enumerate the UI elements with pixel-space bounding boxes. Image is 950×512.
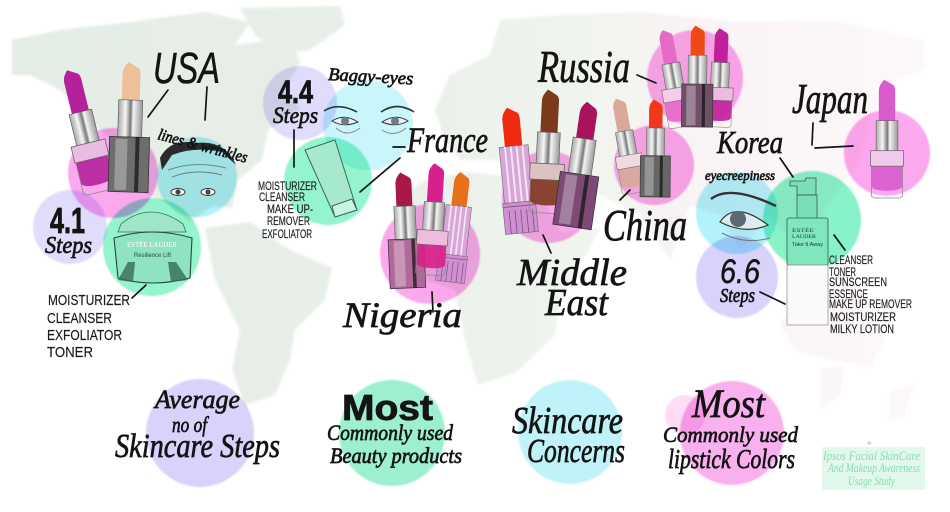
legend: most commonly used lipstick colors: Most: [691, 381, 766, 426]
green watercolor circle: [763, 171, 861, 269]
legend: skincare concerns: [512, 380, 625, 484]
heading: Middle East: Middle: [516, 252, 627, 294]
leader line: [205, 87, 207, 120]
concern: lines and wrinkles: lines & wrinkles: [156, 126, 249, 167]
icon: cleanser pump bottle: ESTÉE: [792, 226, 815, 234]
icon: orange lipstick: [436, 171, 477, 284]
icon: crimson lipstick: [385, 172, 426, 289]
icon: red lipstick: [493, 106, 538, 235]
aqua watercolor circle: [323, 80, 413, 170]
stat: 6.6 steps: Steps: [720, 285, 755, 307]
list: Korea beauty products: MILKY LOTION: [830, 322, 894, 336]
icon: brown lipstick: [528, 89, 568, 214]
stat: 4.1 steps: 4.1: [50, 200, 85, 241]
legend: average number of skincare steps: [115, 379, 280, 487]
icon: pink lipstick: [651, 27, 695, 129]
panel: Russia: [537, 25, 743, 129]
icon: magenta lipstick: [553, 99, 609, 230]
stat: 6.6 steps: 6.6: [720, 253, 760, 291]
legend: skincare concerns: Skincare: [512, 400, 623, 442]
list: France beauty products: REMOVER: [267, 214, 310, 228]
stat: 6.6 steps: [720, 253, 760, 307]
list: Korea beauty products: TONER: [829, 265, 856, 279]
illustration: face cream jar: Resilience Lift: [134, 253, 171, 259]
list: Korea beauty products: ESSENCE: [829, 287, 868, 301]
leader line: [393, 146, 405, 148]
icon: orange lipstick: [681, 25, 713, 127]
leader line: [620, 190, 630, 200]
panel: Nigeria: [342, 162, 480, 335]
stat: 4.4 steps: 4.4: [278, 74, 313, 110]
list: Korea beauty products: MOISTURIZER: [830, 310, 896, 324]
pink watercolor circle: [647, 30, 743, 126]
list: France beauty products: CLEANSER: [259, 190, 305, 204]
heading: Russia: Russia: [537, 41, 630, 92]
pink watercolor circle: [844, 110, 930, 196]
leader line: [815, 146, 853, 148]
concern: baggy eyes: Baggy-eyes: [328, 64, 414, 88]
icon: orchid lipstick: [871, 80, 903, 198]
list: Korea beauty products: [829, 253, 912, 336]
world map background: [12, 6, 925, 422]
pink watercolor circle: [502, 151, 594, 243]
list: USA beauty products: TONER: [47, 344, 93, 361]
panel: Japan: [792, 77, 930, 198]
icon: cleanser pump bottle: [787, 178, 828, 325]
panel: Korea: [696, 124, 912, 336]
aqua watercolor circle: [157, 137, 237, 217]
heading: Middle East: East: [544, 282, 609, 324]
green watercolor circle: [103, 198, 201, 296]
list: USA beauty products: EXFOLIATOR: [47, 327, 122, 344]
pink watercolor circle: [380, 204, 480, 304]
list: Korea beauty products: MAKE UP REMOVER: [829, 297, 912, 311]
leader line: [148, 90, 168, 117]
source note: Ipsos study: [822, 439, 925, 490]
heading: Korea: Korea: [716, 124, 783, 160]
legend: average number of skincare steps: Skincare Steps: [115, 428, 280, 465]
purple watercolor circle: [263, 66, 337, 140]
illustration: face cream jar: [114, 212, 192, 283]
list: USA beauty products: CLEANSER: [47, 310, 112, 327]
illustration: forehead wrinkles face: [160, 142, 236, 196]
stat: 4.1 steps: Steps: [45, 233, 92, 259]
icon: cleanser pump bottle: LAUDER: [792, 234, 816, 240]
icon: nude lipstick: [108, 61, 152, 193]
leader line: [812, 123, 813, 145]
list: USA beauty products: [47, 292, 130, 361]
list: USA beauty products: MOISTURIZER: [48, 292, 130, 309]
source note: Ipsos study: *: [866, 439, 872, 451]
pink watercolor circle: [68, 128, 158, 218]
pink watercolor circle: [614, 125, 694, 205]
leader line: [543, 235, 551, 253]
leader line: [360, 158, 400, 192]
leader line: [834, 235, 845, 250]
icon: magenta lipstick: [704, 28, 736, 128]
legend: most commonly used lipstick colors: Commonly used: [663, 422, 799, 447]
illustration: baggy eyes: [324, 106, 414, 134]
heading: China: China: [603, 201, 687, 250]
leader line: [293, 130, 295, 167]
legend: most commonly used beauty products: Beauty products: [330, 443, 462, 468]
panel: Middle East: [493, 89, 627, 324]
heading: USA: USA: [153, 44, 220, 93]
stat: 4.4 steps: Steps: [273, 103, 318, 128]
legend: average number of skincare steps: Average: [153, 385, 240, 414]
legend: most commonly used lipstick colors: lipstick Colors: [668, 444, 795, 474]
list: France beauty products: EXFOLIATOR: [262, 227, 312, 241]
leader line: [780, 158, 793, 177]
stat: 4.1 steps: [45, 200, 92, 259]
illustration: face cream jar: ESTĒE LAUDER: [127, 241, 177, 249]
aqua watercolor circle: [696, 172, 778, 254]
heading: Japan: Japan: [792, 77, 868, 123]
list: Korea beauty products: CLEANSER: [829, 253, 873, 267]
icon: hot pink lipstick: [415, 162, 452, 276]
panel: France: [258, 64, 488, 241]
list: France beauty products: MOISTURIZER: [258, 179, 317, 193]
leader line: [760, 292, 785, 304]
legend: most commonly used beauty products: Commonly used: [327, 420, 454, 445]
legend: skincare concerns: Concerns: [527, 433, 625, 470]
list: Korea beauty products: SUNSCREEN: [829, 275, 887, 289]
purple watercolor circle: [33, 190, 107, 264]
list: France beauty products: [258, 179, 317, 241]
icon: nude lipstick: [605, 96, 648, 195]
source note: Ipsos study: And Makeup Awareness: [827, 460, 920, 475]
purple watercolor circle: [696, 236, 778, 318]
heading: Middle East: [516, 252, 627, 324]
source note: Ipsos study: Ipsos Facial SkinCare: [822, 448, 920, 463]
icon: cleanser tube: [305, 140, 357, 217]
stat: 4.4 steps: [273, 74, 318, 128]
icon: red lipstick: [640, 99, 671, 197]
legend: most commonly used beauty products: [327, 380, 462, 486]
leader line: [432, 292, 433, 312]
legend: most commonly used lipstick colors: [663, 381, 799, 485]
source note: Ipsos study: Usage Study: [848, 473, 895, 488]
icon: cleanser pump bottle: Take It Away: [792, 242, 823, 248]
icon: magenta lipstick: [53, 65, 117, 196]
panel: China: [603, 96, 694, 250]
leader line: [132, 285, 146, 298]
heading: Nigeria: Nigeria: [342, 295, 462, 335]
legend: average number of skincare steps: no of: [172, 412, 209, 437]
heading: France: France: [406, 120, 488, 160]
list: France beauty products: MAKE UP-: [267, 202, 313, 216]
illustration: eye creepiness: [711, 193, 776, 241]
panel: USA: [33, 44, 249, 361]
concern: eye creepiness: eyecreepiness: [705, 169, 775, 184]
legend: most commonly used beauty products: Most: [342, 387, 433, 428]
leader line: [637, 75, 656, 83]
green watercolor circle: [284, 137, 372, 225]
